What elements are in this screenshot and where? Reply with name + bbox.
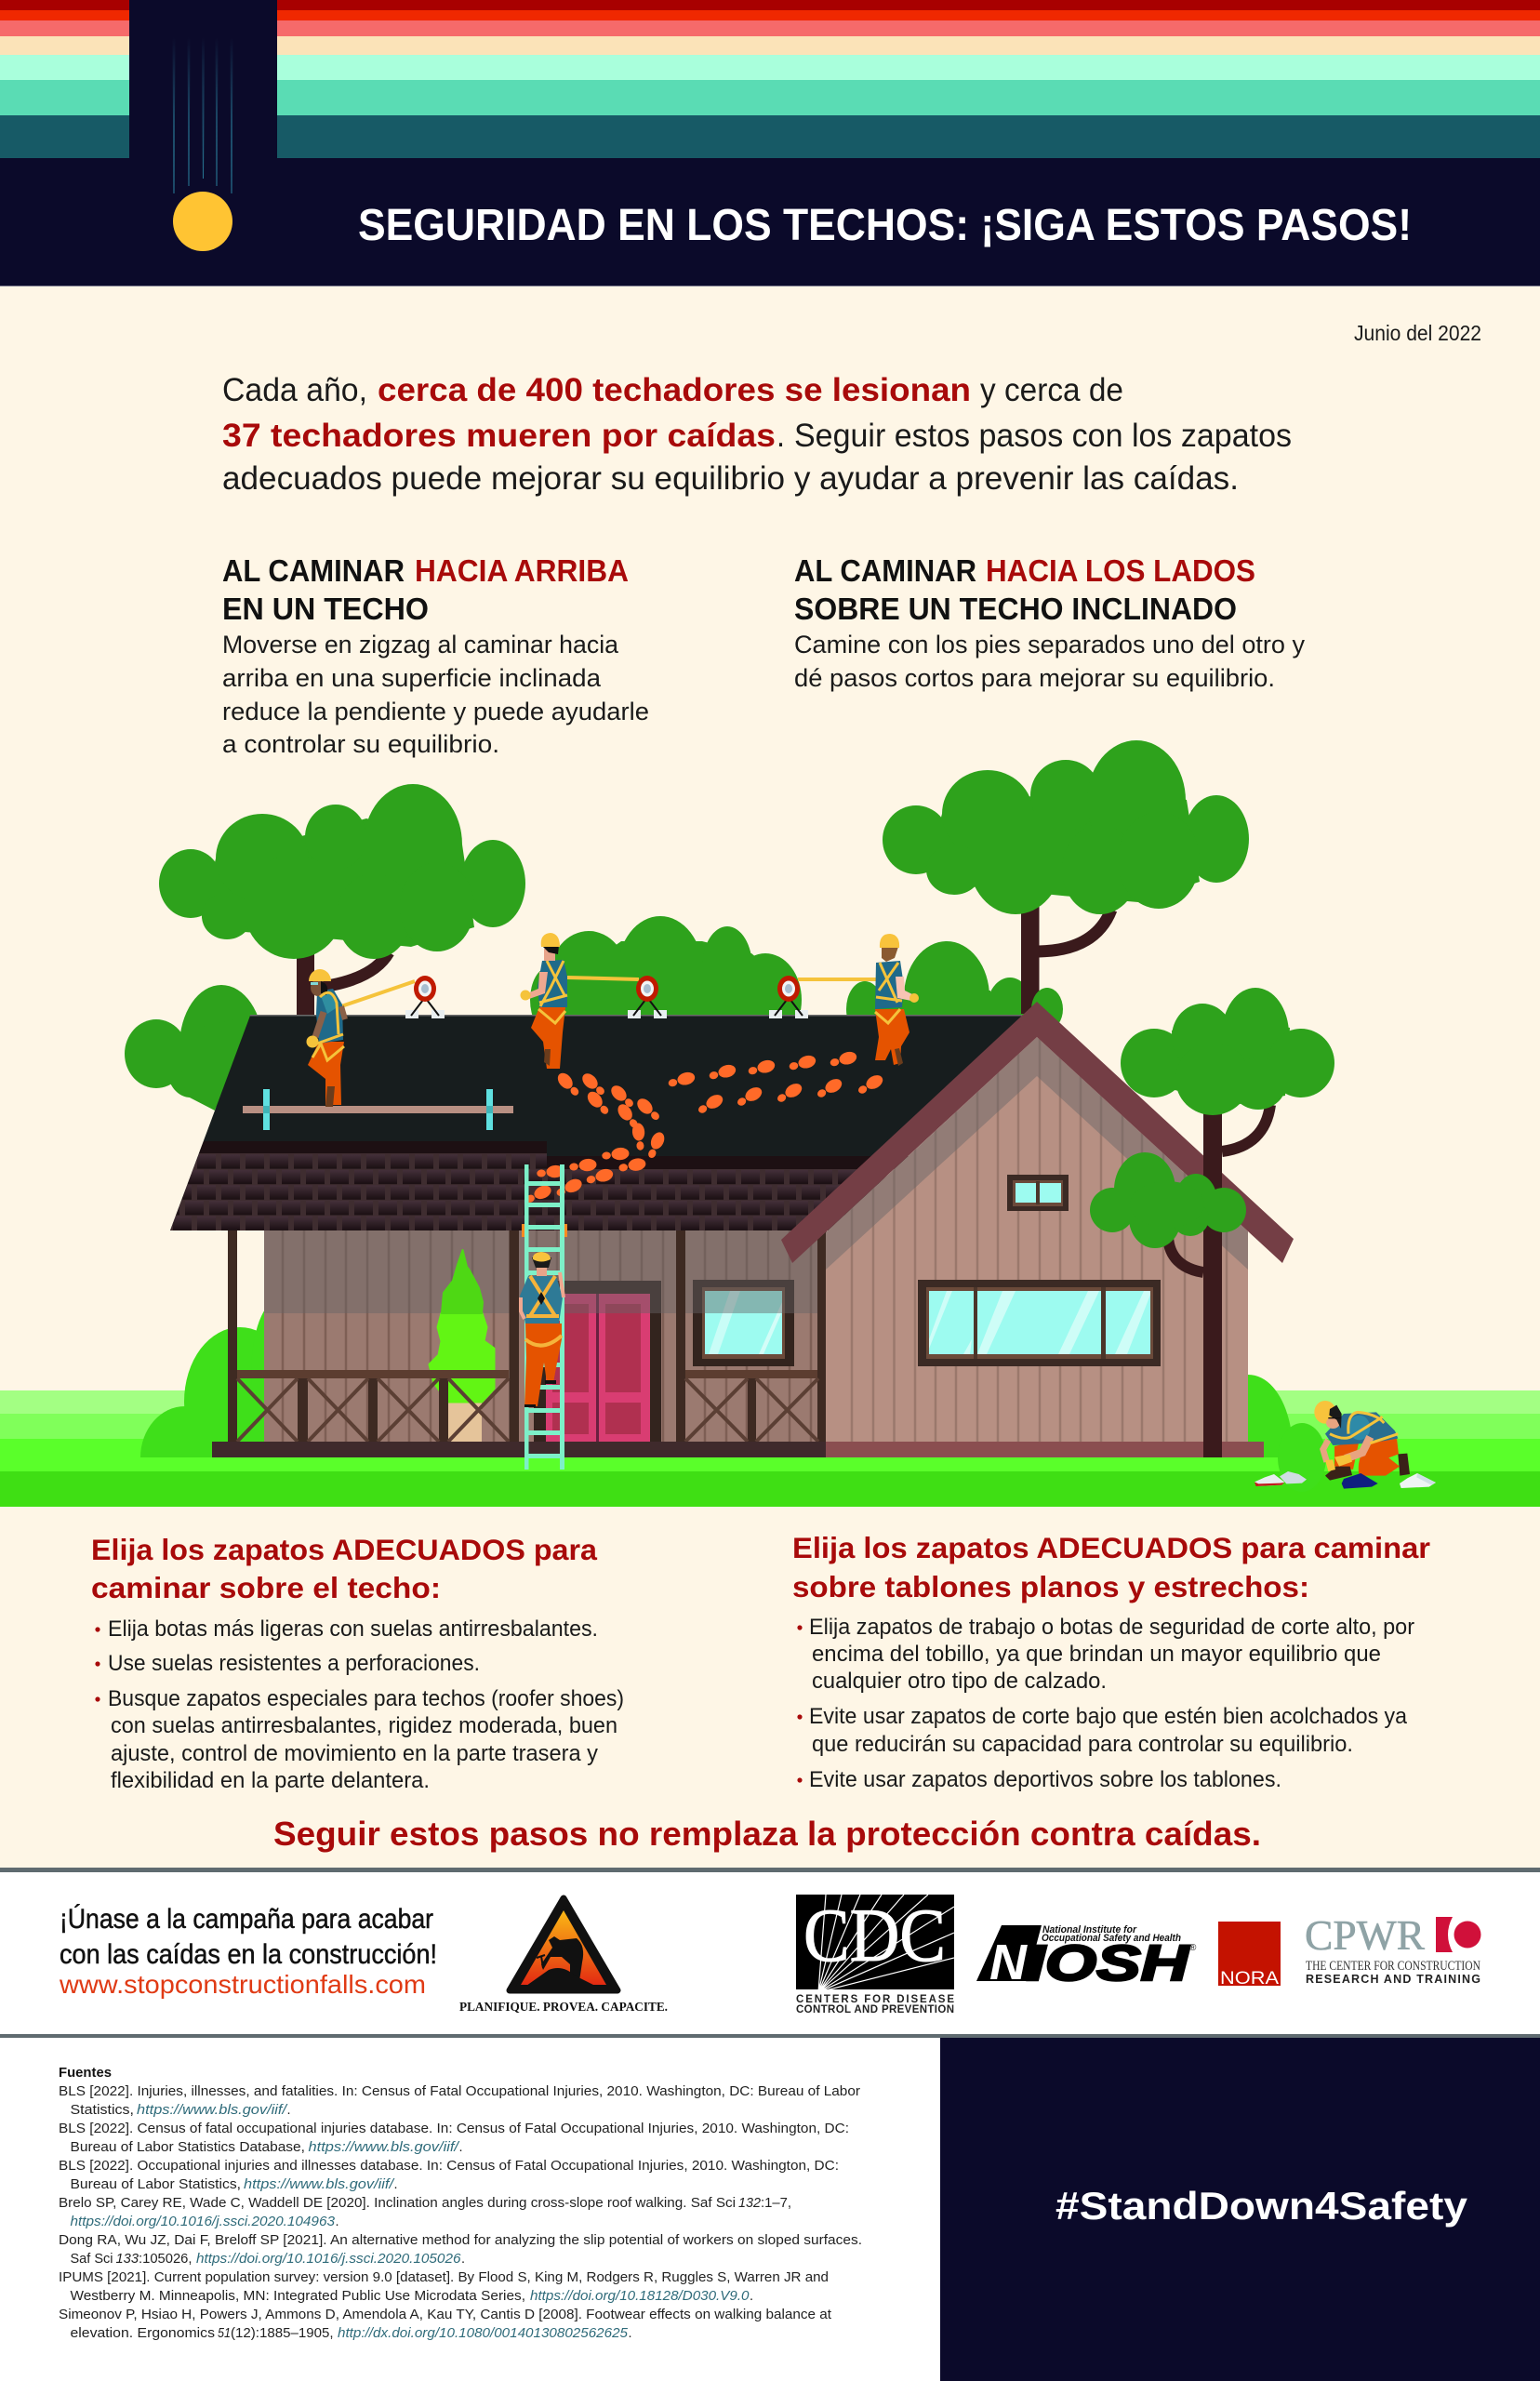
roof bbox=[170, 1015, 1037, 1230]
intro paragraph: . bbox=[777, 418, 785, 454]
logo: CPWR: RESEARCH AND TRAINING bbox=[1306, 1973, 1480, 1986]
logo: fall prevention triangle: PLANIFIQUE. PROVEA. CAPACITE. bbox=[459, 2001, 668, 2015]
worker on right of roof bbox=[875, 934, 919, 1066]
bullet list: flexibilidad en la parte delantera. bbox=[111, 1768, 430, 1793]
heading: caminar sobre el techo: bbox=[91, 1571, 441, 1604]
bullet list: cualquier otro tipo de calzado. bbox=[812, 1669, 1107, 1694]
panel: sources: 51 bbox=[218, 2326, 231, 2341]
intro paragraph: cerca de 400 techadores se lesionan bbox=[378, 372, 971, 408]
porch wall bbox=[264, 1230, 818, 1442]
panel: sources: Dong RA, Wu JZ, Dai F, Breloff SP [2021]. An alternative method for analyzing the slip potential of workers on sloped surfaces. bbox=[59, 2233, 862, 2248]
panel: sources: :1–7, bbox=[761, 2196, 791, 2211]
panel: sources bbox=[0, 2038, 940, 2381]
bush: left of house bbox=[140, 1311, 264, 1457]
main window bbox=[918, 1280, 1161, 1366]
text block: walking upward: Moverse en zigzag al caminar hacia bbox=[222, 631, 618, 658]
ground bbox=[0, 1390, 1540, 1507]
bullet list: Evite usar zapatos deportivos sobre los tablones. bbox=[809, 1767, 1281, 1792]
logo: fall prevention triangle bbox=[459, 1898, 668, 2015]
campaign text: ¡Únase a la campaña para acabar bbox=[60, 1904, 433, 1935]
footprints bbox=[524, 1050, 885, 1205]
bullet list: que reducirán su capacidad para controlar su equilibrio. bbox=[812, 1732, 1353, 1757]
logo: CDC: CDC bbox=[803, 1893, 946, 1977]
panel: sources: . bbox=[629, 2326, 632, 2341]
bullet list: con suelas antirresbalantes, rigidez moderada, buen bbox=[111, 1713, 617, 1738]
campaign text: www.stopconstructionfalls.com bbox=[59, 1970, 426, 1999]
logo: CPWR bbox=[1305, 1912, 1480, 1986]
potted plant bbox=[430, 1250, 494, 1442]
text block: walking upward: AL CAMINAR bbox=[222, 553, 405, 588]
panel: sources: 133 bbox=[115, 2252, 139, 2267]
text block: walking sideways: dé pasos cortos para mejorar su equilibrio. bbox=[794, 664, 1275, 692]
logo: CDC bbox=[796, 1893, 954, 2015]
tree: left bbox=[159, 784, 525, 1018]
ladder bbox=[522, 1164, 567, 1470]
panel: sources: BLS [2022]. Occupational injuries and illnesses database. In: Census of Fatal Occupational Injuries, 2010. Washington, DC: bbox=[59, 2159, 839, 2174]
falling sun icon bbox=[173, 37, 232, 251]
worker on ladder bbox=[520, 1252, 564, 1407]
panel: sources: . bbox=[750, 2289, 753, 2304]
worker kneeling and shoes bbox=[1255, 1401, 1436, 1489]
bullet list: Elija zapatos de trabajo o botas de seguridad de corte alto, por bbox=[809, 1615, 1414, 1640]
text block: walking upward bbox=[222, 553, 649, 758]
worker in middle of roof bbox=[521, 933, 567, 1069]
logo: NIOSH bbox=[976, 1924, 1197, 1991]
panel: sources: BLS [2022]. Census of fatal occupational injuries database. In: Census of Fatal Occupational Injuries, 2010. Washington, DC: bbox=[59, 2122, 849, 2136]
logo: CPWR: THE CENTER FOR CONSTRUCTION bbox=[1306, 1959, 1480, 1974]
text block: walking upward: HACIA ARRIBA bbox=[415, 553, 629, 588]
panel: sources: https://www.bls.gov/iif/ bbox=[244, 2177, 395, 2192]
bush: right of house bbox=[1248, 1375, 1326, 1492]
text block: walking sideways: HACIA LOS LADOS bbox=[986, 553, 1255, 588]
panel: sources: https://www.bls.gov/iif/ bbox=[309, 2140, 460, 2155]
panel: sources: http://dx.doi.org/10.1080/00140130802562625 bbox=[338, 2326, 629, 2341]
door bbox=[534, 1281, 661, 1442]
bullet list: ajuste, control de movimiento en la parte trasera y bbox=[111, 1741, 598, 1766]
panel: sources: Saf Sci bbox=[71, 2252, 113, 2267]
heading bbox=[792, 1531, 1430, 1603]
panel: sources: https://doi.org/10.1016/j.ssci.2020.104963 bbox=[71, 2215, 335, 2229]
heading: Elija los zapatos ADECUADOS para bbox=[91, 1533, 597, 1566]
panel: sources: :105026, bbox=[139, 2252, 192, 2267]
intro paragraph: Seguir estos pasos con los zapatos bbox=[794, 418, 1292, 454]
panel: sources: . bbox=[459, 2140, 463, 2155]
panel: sources: . bbox=[394, 2177, 398, 2192]
date: Junio del 2022 bbox=[1354, 321, 1481, 345]
bullet list: Busque zapatos especiales para techos (roofer shoes) bbox=[108, 1686, 624, 1711]
heading bbox=[91, 1533, 597, 1604]
header banner bbox=[0, 0, 1540, 286]
bush: far left behind roof bbox=[125, 985, 263, 1111]
worker on plank bbox=[307, 969, 345, 1107]
text block: walking upward: arriba en una superficie inclinada bbox=[222, 664, 601, 692]
panel: sources: . bbox=[335, 2215, 339, 2229]
panel: sources: https://doi.org/10.1016/j.ssci.2020.105026 bbox=[196, 2252, 461, 2267]
text block: walking sideways: AL CAMINAR bbox=[794, 553, 976, 588]
panel: sources: . bbox=[286, 2103, 291, 2118]
bullet list bbox=[797, 1615, 1414, 1792]
panel: sources: 132 bbox=[738, 2196, 761, 2211]
logo: NIOSH: Occupational Safety and Health bbox=[1042, 1933, 1181, 1944]
logo: CPWR: CPWR bbox=[1305, 1912, 1425, 1959]
bullet list: encima del tobillo, ya que brindan un mayor equilibrio que bbox=[812, 1642, 1381, 1667]
plank with brackets bbox=[243, 1089, 513, 1130]
panel: hashtag bbox=[940, 2038, 1540, 2381]
tree: centre right bbox=[883, 740, 1249, 1031]
shadow under eaves bbox=[264, 1230, 818, 1313]
text block: walking upward: EN UN TECHO bbox=[222, 592, 429, 626]
intro paragraph: adecuados puede mejorar su equilibrio y ayudar a prevenir las caídas. bbox=[222, 460, 1239, 497]
gable trim bbox=[781, 1002, 1294, 1263]
campaign text bbox=[59, 1904, 437, 1999]
anchors and lifelines bbox=[341, 976, 879, 1018]
text block: walking upward: reduce la pendiente y puede ayudarle bbox=[222, 698, 649, 725]
panel: sources: (12):1885–1905, bbox=[231, 2326, 333, 2341]
logo: NIOSH: N bbox=[989, 1935, 1028, 1990]
bullet list bbox=[95, 1616, 624, 1793]
text block: walking sideways bbox=[794, 553, 1306, 692]
tree: right bbox=[1090, 988, 1334, 1457]
text block: walking sideways: Camine con los pies separados uno del otro y bbox=[794, 631, 1306, 658]
panel: sources: https://doi.org/10.18128/D030.V9.0 bbox=[530, 2289, 750, 2304]
intro paragraph: Cada año, bbox=[222, 372, 367, 408]
text block: walking sideways: SOBRE UN TECHO INCLINADO bbox=[794, 592, 1237, 626]
panel: campaign and logos bbox=[0, 1868, 1540, 2038]
gable wall bbox=[826, 1023, 1264, 1457]
title: SEGURIDAD EN LOS TECHOS: ¡SIGA ESTOS PASOS! bbox=[358, 201, 1412, 250]
bullet list: Use suelas resistentes a perforaciones. bbox=[108, 1651, 480, 1676]
panel: sources: . bbox=[461, 2252, 465, 2267]
intro paragraph: y cerca de bbox=[980, 372, 1123, 408]
panel: shoes for roof bbox=[91, 1533, 624, 1793]
logo: NIOSH: IOSH bbox=[1027, 1935, 1189, 1991]
intro paragraph bbox=[222, 372, 1292, 497]
low tree crown bbox=[1090, 1152, 1246, 1248]
panel: sources: Bureau of Labor Statistics Database, bbox=[71, 2140, 305, 2155]
panel: sources: Westberry M. Minneapolis, MN: Integrated Public Use Microdata Series, bbox=[71, 2289, 525, 2304]
heading: sobre tablones planos y estrechos: bbox=[792, 1570, 1309, 1603]
illustration: house scene bbox=[0, 740, 1540, 1509]
small attic window bbox=[1007, 1175, 1069, 1211]
panel: sources: Brelo SP, Carey RE, Wade C, Waddell DE [2020]. Inclination angles during cross-slope roof walking. Saf Sci bbox=[59, 2196, 736, 2211]
panel: sources: Bureau of Labor Statistics, bbox=[71, 2177, 241, 2192]
panel: sources: https://www.bls.gov/iif/ bbox=[137, 2103, 288, 2118]
panel: hashtag: #StandDown4Safety bbox=[1055, 2184, 1468, 2228]
panel: sources: elevation. Ergonomics bbox=[71, 2326, 215, 2341]
intro paragraph: 37 techadores mueren por caídas bbox=[222, 418, 776, 454]
heading: Elija los zapatos ADECUADOS para caminar bbox=[792, 1531, 1430, 1564]
panel: sources: Fuentes bbox=[59, 2066, 112, 2081]
logo: NIOSH: National Institute for bbox=[1042, 1924, 1137, 1935]
logo: NORA: NORA bbox=[1220, 1969, 1279, 1989]
campaign text: con las caídas en la construcción! bbox=[60, 1939, 437, 1970]
logo: NIOSH: ® bbox=[1189, 1943, 1197, 1953]
panel: sources: BLS [2022]. Injuries, illnesses, and fatalities. In: Census of Fatal Occupational Injuries, 2010. Washington, DC: Bureau of Labor bbox=[59, 2084, 860, 2099]
logo: CDC: CENTERS FOR DISEASE bbox=[796, 1994, 954, 2005]
panel: shoes for planks bbox=[792, 1531, 1430, 1792]
panel: sources: Simeonov P, Hsiao H, Powers J, Ammons D, Amendola A, Kau TY, Cantis D [2008]. Footwear effects on walking balance at bbox=[59, 2308, 831, 2322]
porch posts and railing bbox=[212, 1230, 827, 1457]
panel: sources: IPUMS [2021]. Current population survey: version 9.0 [dataset]. By Flood S, King M, Rodgers R, Ruggles S, Warren JR and bbox=[59, 2270, 829, 2285]
porch window bbox=[693, 1280, 794, 1366]
logo: CDC: CONTROL AND PREVENTION bbox=[796, 2004, 954, 2015]
text block: walking upward: a controlar su equilibrio. bbox=[222, 730, 499, 758]
panel: sources: Statistics, bbox=[71, 2103, 134, 2118]
bullet list: Evite usar zapatos de corte bajo que estén bien acolchados ya bbox=[809, 1704, 1408, 1729]
logo: NORA bbox=[1218, 1922, 1281, 1989]
bullet list: Elija botas más ligeras con suelas antirresbalantes. bbox=[108, 1616, 598, 1642]
bushes behind roof ridge bbox=[530, 916, 1024, 1016]
closing statement: Seguir estos pasos no remplaza la protección contra caídas. bbox=[273, 1815, 1261, 1853]
